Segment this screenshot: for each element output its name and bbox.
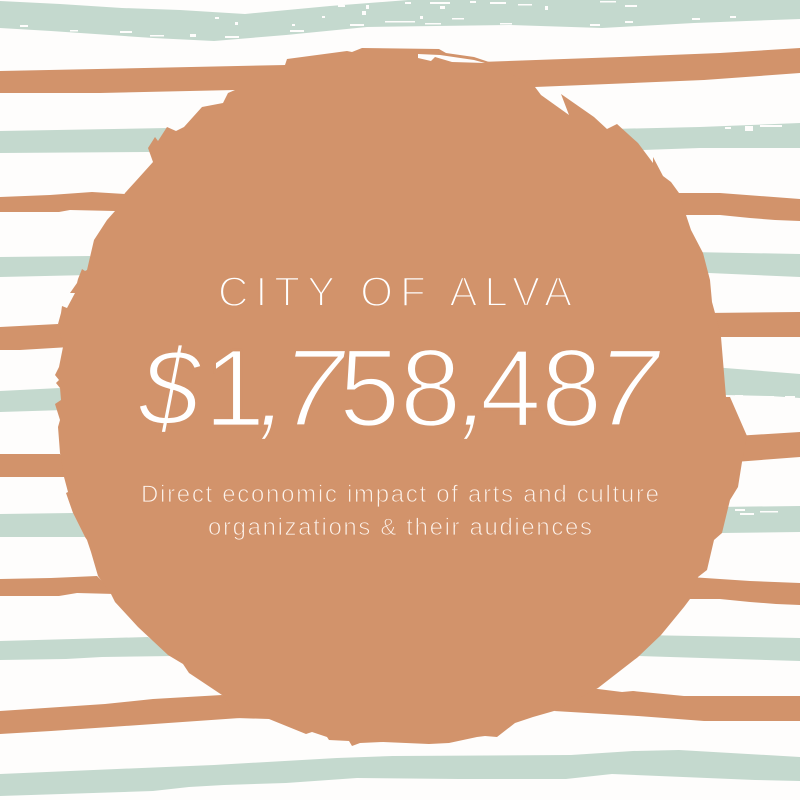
- title: CITY OF ALVA: [218, 268, 572, 315]
- dollar amount: 8: [400, 327, 461, 450]
- description: [141, 481, 659, 541]
- description line 2: organizations & their audiences: [208, 514, 592, 541]
- dollar amount: 7: [597, 327, 662, 450]
- dollar amount: $: [138, 327, 202, 450]
- dollar amount: 1: [204, 327, 265, 450]
- dollar amount: ,: [459, 327, 490, 450]
- brush speckles: [20, 1, 795, 515]
- dollar amount: 7: [282, 327, 347, 450]
- central brush circle: [55, 48, 747, 746]
- dollar amount: 4: [480, 327, 541, 450]
- description line 1: Direct economic impact of arts and culture: [141, 481, 659, 508]
- dollar amount: 5: [339, 327, 400, 450]
- dollar amount: ,: [257, 327, 288, 450]
- dollar amount: 8: [541, 327, 602, 450]
